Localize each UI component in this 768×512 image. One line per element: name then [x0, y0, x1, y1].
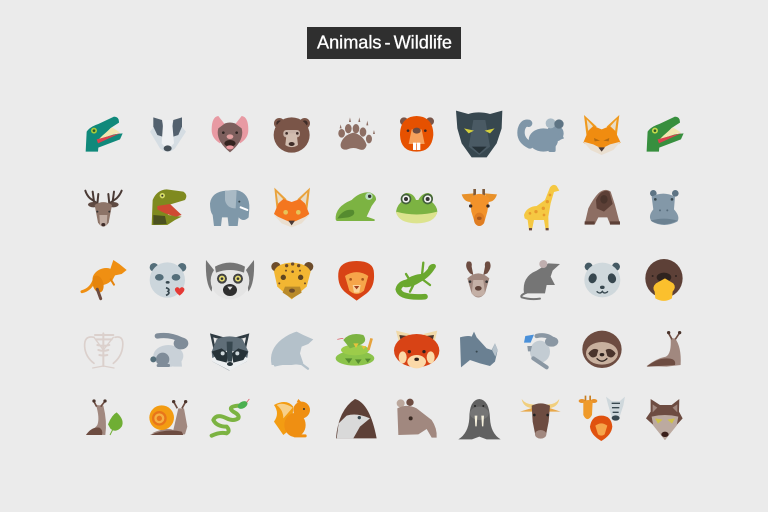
icon: chinchilla — [521, 118, 564, 152]
icon: giraffe face — [462, 189, 497, 226]
icon: rattlesnake — [336, 334, 374, 366]
icon: squirrel — [274, 399, 310, 437]
icon: giraffe body — [524, 185, 559, 230]
icon: kangaroo — [82, 260, 127, 299]
icon: platypus — [645, 259, 683, 301]
icon: fox face orange — [583, 115, 621, 155]
icon: skeleton — [85, 333, 123, 368]
icon: ground mouse in burrow — [336, 399, 377, 438]
icon: frog side — [336, 192, 376, 221]
icon: wildebeest — [520, 399, 561, 439]
icon: rabbit — [150, 335, 188, 367]
icon: raptor dinosaur — [152, 189, 186, 225]
icon: jaguar — [271, 262, 313, 299]
icon: rat gray — [521, 260, 560, 299]
icon: slug — [647, 331, 681, 367]
icon: llama — [466, 261, 491, 297]
icon: sloth — [582, 331, 622, 368]
icon: frog face — [396, 193, 437, 223]
icon: panda blowing kiss — [150, 262, 186, 298]
title — [307, 27, 461, 59]
icon: snail — [149, 400, 187, 435]
icon: crocodile green — [647, 117, 684, 152]
icon: lizard — [398, 262, 437, 297]
icon: giraffe zebra lion trio — [579, 396, 625, 441]
icon: slug with leaf — [86, 399, 123, 435]
icon: panther — [456, 111, 502, 157]
icon: crocodile teal — [86, 117, 123, 152]
icon: wolf — [646, 399, 683, 440]
icon: deer — [85, 191, 122, 227]
icon: bear — [274, 117, 310, 153]
icon: snake — [212, 399, 249, 436]
icon: panda — [584, 263, 620, 297]
icon: beaver — [400, 116, 434, 152]
icon: hippo — [650, 190, 679, 225]
title: Animals - Wildlife — [317, 32, 452, 52]
icon: tapir — [397, 399, 437, 438]
icon: elephant — [210, 190, 249, 226]
icon: rhino — [460, 332, 498, 367]
icon: running rabbit — [524, 335, 558, 367]
icon: raccoon — [210, 333, 249, 371]
icon: lemur — [206, 260, 254, 299]
icon: paw print — [338, 117, 375, 150]
icon: badger — [150, 117, 186, 152]
icon: lion — [338, 261, 374, 301]
icon: red panda — [394, 331, 439, 368]
icon: rat silver — [271, 332, 313, 369]
icon: fox face — [274, 188, 310, 227]
icon: gorilla — [585, 190, 620, 225]
icon: walrus — [458, 399, 501, 439]
icon: bat — [212, 116, 248, 152]
